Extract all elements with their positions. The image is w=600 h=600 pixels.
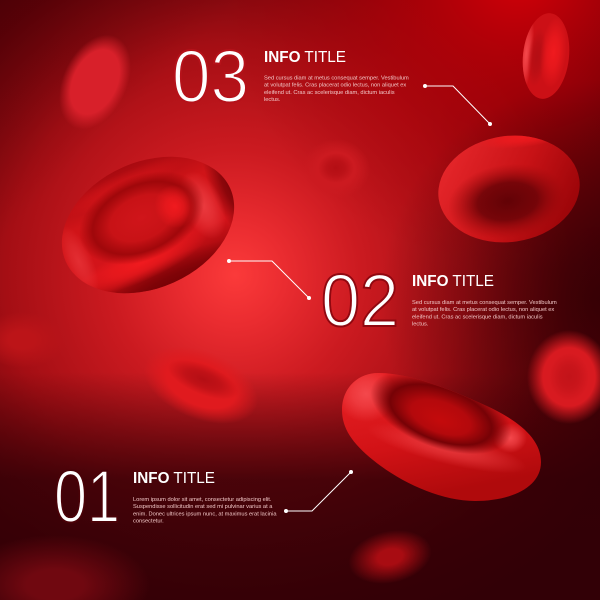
body text 02: at volutpat felis. Cras placerat odio lectus, non aliquet ex: [412, 307, 554, 313]
red blood cell: large left: [62, 156, 234, 294]
blurred cell: mid: [133, 331, 269, 439]
body text 03: Sed cursus diam at metus consequat semper. Vestibulum: [264, 76, 409, 82]
heading 03: INFO TITLE: [264, 49, 346, 66]
number 02: 02: [321, 259, 399, 342]
body text 03: lectus.: [264, 97, 281, 103]
blurred cell: top centre: [302, 139, 370, 199]
heading 01: INFO TITLE: [133, 470, 215, 487]
body text 02: lectus.: [412, 322, 429, 328]
block 03: [172, 35, 492, 126]
heading 02: INFO TITLE: [412, 273, 494, 290]
blurred cell: top left: [45, 23, 145, 141]
connector 02: [227, 259, 311, 300]
blurred cell: right edge: [527, 330, 600, 424]
red blood cell: lower right: [342, 373, 541, 501]
block 01: [54, 455, 353, 538]
connector 01: [284, 470, 353, 513]
body text 03: at volutpat felis. Cras placerat odio lectus, non aliquet ex: [264, 83, 406, 89]
body text 02: eleifend ut. Cras ac scelerisque diam, dictum iaculis: [412, 314, 543, 320]
connector 03: [423, 84, 492, 126]
body text 01: consectetur.: [133, 519, 164, 525]
body text 03: eleifend ut. Cras ac scelerisque diam, dictum iaculis: [264, 90, 395, 96]
blurred cell: bottom left: [0, 535, 150, 600]
body text 01: Suspendisse sollicitudin erat sed mi pulvinar varius at a: [133, 504, 273, 510]
blurred cell: bottom centre: [344, 523, 436, 591]
number 01: 01: [54, 455, 120, 538]
body text 01: Lorem ipsum dolor sit amet, consectetur adipiscing elit.: [133, 497, 272, 503]
number 03: 03: [172, 35, 249, 118]
body text 02: Sed cursus diam at metus consequat semper. Vestibulum: [412, 300, 557, 306]
block 02: [227, 259, 557, 342]
red blood cell: right: [438, 136, 580, 242]
red blood cell: top right small: [522, 13, 570, 99]
blurred cell: left edge: [0, 312, 66, 368]
body text 01: enim. Donec ultrices ipsum nunc, at maximus erat lacinia: [133, 511, 277, 517]
